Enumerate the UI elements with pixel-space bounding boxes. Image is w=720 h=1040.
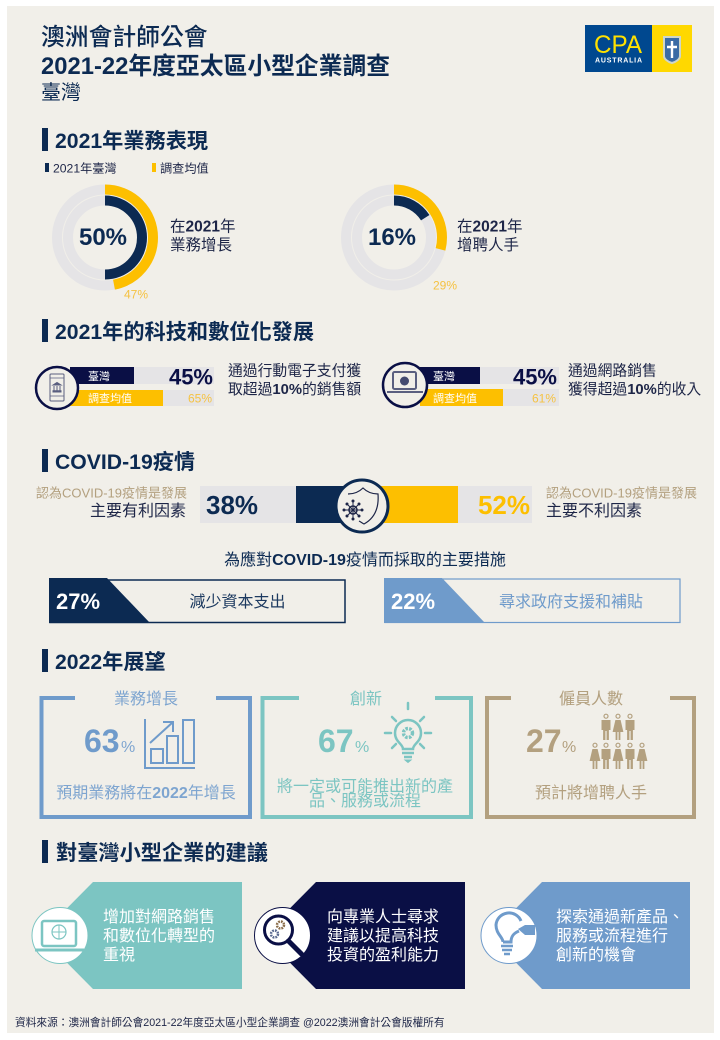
bar chart: mobile payments xyxy=(36,364,214,409)
text: business growth: 在2021年 xyxy=(170,218,236,236)
text: mobile payments: 取超過10%的銷售額 xyxy=(228,381,361,398)
bar chart: COVID impact: 38% xyxy=(206,490,258,520)
bar chart: mobile payments: 45% xyxy=(169,364,213,390)
source footer: 資料來源：澳洲會計師公會2021-22年度亞太區小型企業調查 @2022澳洲會計公會版權所有 xyxy=(15,1016,445,1029)
bar chart: online sales: 61% xyxy=(532,392,556,406)
bar chart: online sales: 45% xyxy=(513,364,557,390)
icon: shield with virus xyxy=(336,480,388,532)
text: mobile payments xyxy=(228,362,361,398)
card: explore innovation opportunities xyxy=(481,882,690,989)
panel: business growth outlook: % xyxy=(121,739,135,756)
icon: magnifier with gears xyxy=(254,908,310,964)
legend xyxy=(45,160,209,176)
card: online sales and digital transformation xyxy=(32,882,242,989)
panel: innovation outlook: % xyxy=(355,739,369,756)
logo: CPA Australia: AUSTRALIA xyxy=(595,58,642,64)
icon: laptop xyxy=(32,908,88,964)
card: explore innovation opportunities: 探索通過新產品、 xyxy=(556,908,684,926)
bar chart: mobile payments: 調查均值 xyxy=(88,391,132,405)
text: online sales: 獲得超過10%的收入 xyxy=(568,381,701,398)
icon: rising bar chart xyxy=(145,719,195,768)
panel: employee numbers outlook: 預計將增聘人手 xyxy=(535,784,647,802)
text: COVID favourable: 認為COVID-19疫情是發展 xyxy=(36,486,187,500)
card: explore innovation opportunities: 創新的機會 xyxy=(556,946,636,964)
panel: employee numbers outlook xyxy=(487,690,694,817)
title block xyxy=(41,24,390,104)
section heading: COVID-19: COVID-19疫情 xyxy=(55,450,195,474)
panel: employee numbers outlook: 27 xyxy=(526,723,562,759)
legend: 調查均值 xyxy=(160,160,209,176)
measure: seek government support xyxy=(384,578,680,623)
subheading: main measures: 為應對COVID-19疫情而採取的主要措施 xyxy=(224,550,506,569)
bar chart: online sales: 調查均值 xyxy=(433,391,477,405)
text: hiring: 在2021年 xyxy=(457,218,523,236)
panel: business growth outlook: 預期業務將在2022年增長 xyxy=(56,784,236,802)
card: online sales and digital transformation: 重視 xyxy=(103,946,135,964)
section heading: technology and digitalisation: 2021年的科技和數位化發展 xyxy=(55,319,314,344)
panel: innovation outlook: 品、服務或流程 xyxy=(309,792,421,810)
donut chart: business growth xyxy=(57,190,153,302)
card: seek professional advice xyxy=(254,882,465,989)
panel: business growth outlook: 業務增長 xyxy=(114,690,178,708)
panel: employee numbers outlook: 僱員人數 xyxy=(559,690,623,708)
icon: light bulb with gear xyxy=(385,703,431,762)
donut chart: business growth: 50% xyxy=(79,224,127,251)
measure: reduce capital expenditure xyxy=(49,578,345,623)
text: hiring: 增聘人手 xyxy=(457,236,519,254)
bar chart: COVID impact: 52% xyxy=(478,490,530,520)
text: mobile payments: 通過行動電子支付獲 xyxy=(228,362,361,380)
logo: CPA Australia xyxy=(585,25,692,72)
logo: CPA Australia: CPA xyxy=(594,31,642,59)
measure: reduce capital expenditure: 27% xyxy=(56,589,100,614)
icon: laptop with globe xyxy=(383,363,427,407)
text: online sales: 通過網路銷售 xyxy=(568,362,657,380)
title block: 2021-22年度亞太區小型企業調查 xyxy=(41,53,390,80)
panel: innovation outlook: 67 xyxy=(318,723,354,759)
icon: people group xyxy=(590,714,647,769)
bar chart: online sales xyxy=(383,363,559,407)
icon: phone with bank xyxy=(36,367,78,409)
panel: innovation outlook: 創新 xyxy=(350,690,382,708)
panel: innovation outlook xyxy=(262,690,471,817)
section heading: 2022 outlook: 2022年展望 xyxy=(55,650,166,674)
title block: 澳洲會計師公會 xyxy=(41,24,208,51)
bar chart: COVID impact xyxy=(200,480,532,532)
section heading: 2021 business performance: 2021年業務表現 xyxy=(55,129,208,153)
text: business growth xyxy=(170,218,236,254)
text: COVID unfavourable xyxy=(546,486,697,520)
text: online sales xyxy=(568,362,701,398)
bar chart: online sales: 臺灣 xyxy=(433,369,455,383)
measure: seek government support: 尋求政府支援和補貼 xyxy=(499,593,643,611)
text: hiring xyxy=(457,218,523,254)
panel: business growth outlook: 63 xyxy=(84,723,120,759)
text: COVID unfavourable: 認為COVID-19疫情是發展 xyxy=(546,486,697,500)
panel: business growth outlook xyxy=(42,690,250,817)
card: seek professional advice: 向專業人士尋求 xyxy=(327,908,439,926)
text: COVID favourable xyxy=(36,486,187,520)
panel: innovation outlook: 將一定或可能推出新的產 xyxy=(277,778,453,796)
donut chart: hiring: 16% xyxy=(368,224,416,251)
card: seek professional advice: 建議以提高科技 xyxy=(327,927,439,945)
card: explore innovation opportunities: 服務或流程進行 xyxy=(556,927,668,945)
card: online sales and digital transformation: 和數位化轉型的 xyxy=(103,927,215,945)
measure: seek government support: 22% xyxy=(391,589,435,614)
icon: light bulb with tag xyxy=(481,908,537,964)
legend: 2021年臺灣 xyxy=(53,160,117,176)
section heading: recommendations: 對臺灣小型企業的建議 xyxy=(56,841,268,865)
donut chart: hiring xyxy=(346,190,457,292)
text: business growth: 業務增長 xyxy=(170,236,233,254)
card: seek professional advice: 投資的盈利能力 xyxy=(327,946,439,964)
donut chart: business growth: 47% xyxy=(124,288,148,302)
card: online sales and digital transformation: 增加對網路銷售 xyxy=(103,908,215,926)
measure: reduce capital expenditure: 減少資本支出 xyxy=(189,593,286,611)
donut chart: hiring: 29% xyxy=(433,278,457,292)
text: COVID favourable: 主要有利因素 xyxy=(90,502,186,520)
title block: 臺灣 xyxy=(41,81,81,104)
bar chart: mobile payments: 65% xyxy=(188,392,212,406)
bar chart: mobile payments: 臺灣 xyxy=(88,369,110,383)
text: COVID unfavourable: 主要不利因素 xyxy=(546,502,642,520)
panel: employee numbers outlook: % xyxy=(562,739,576,756)
